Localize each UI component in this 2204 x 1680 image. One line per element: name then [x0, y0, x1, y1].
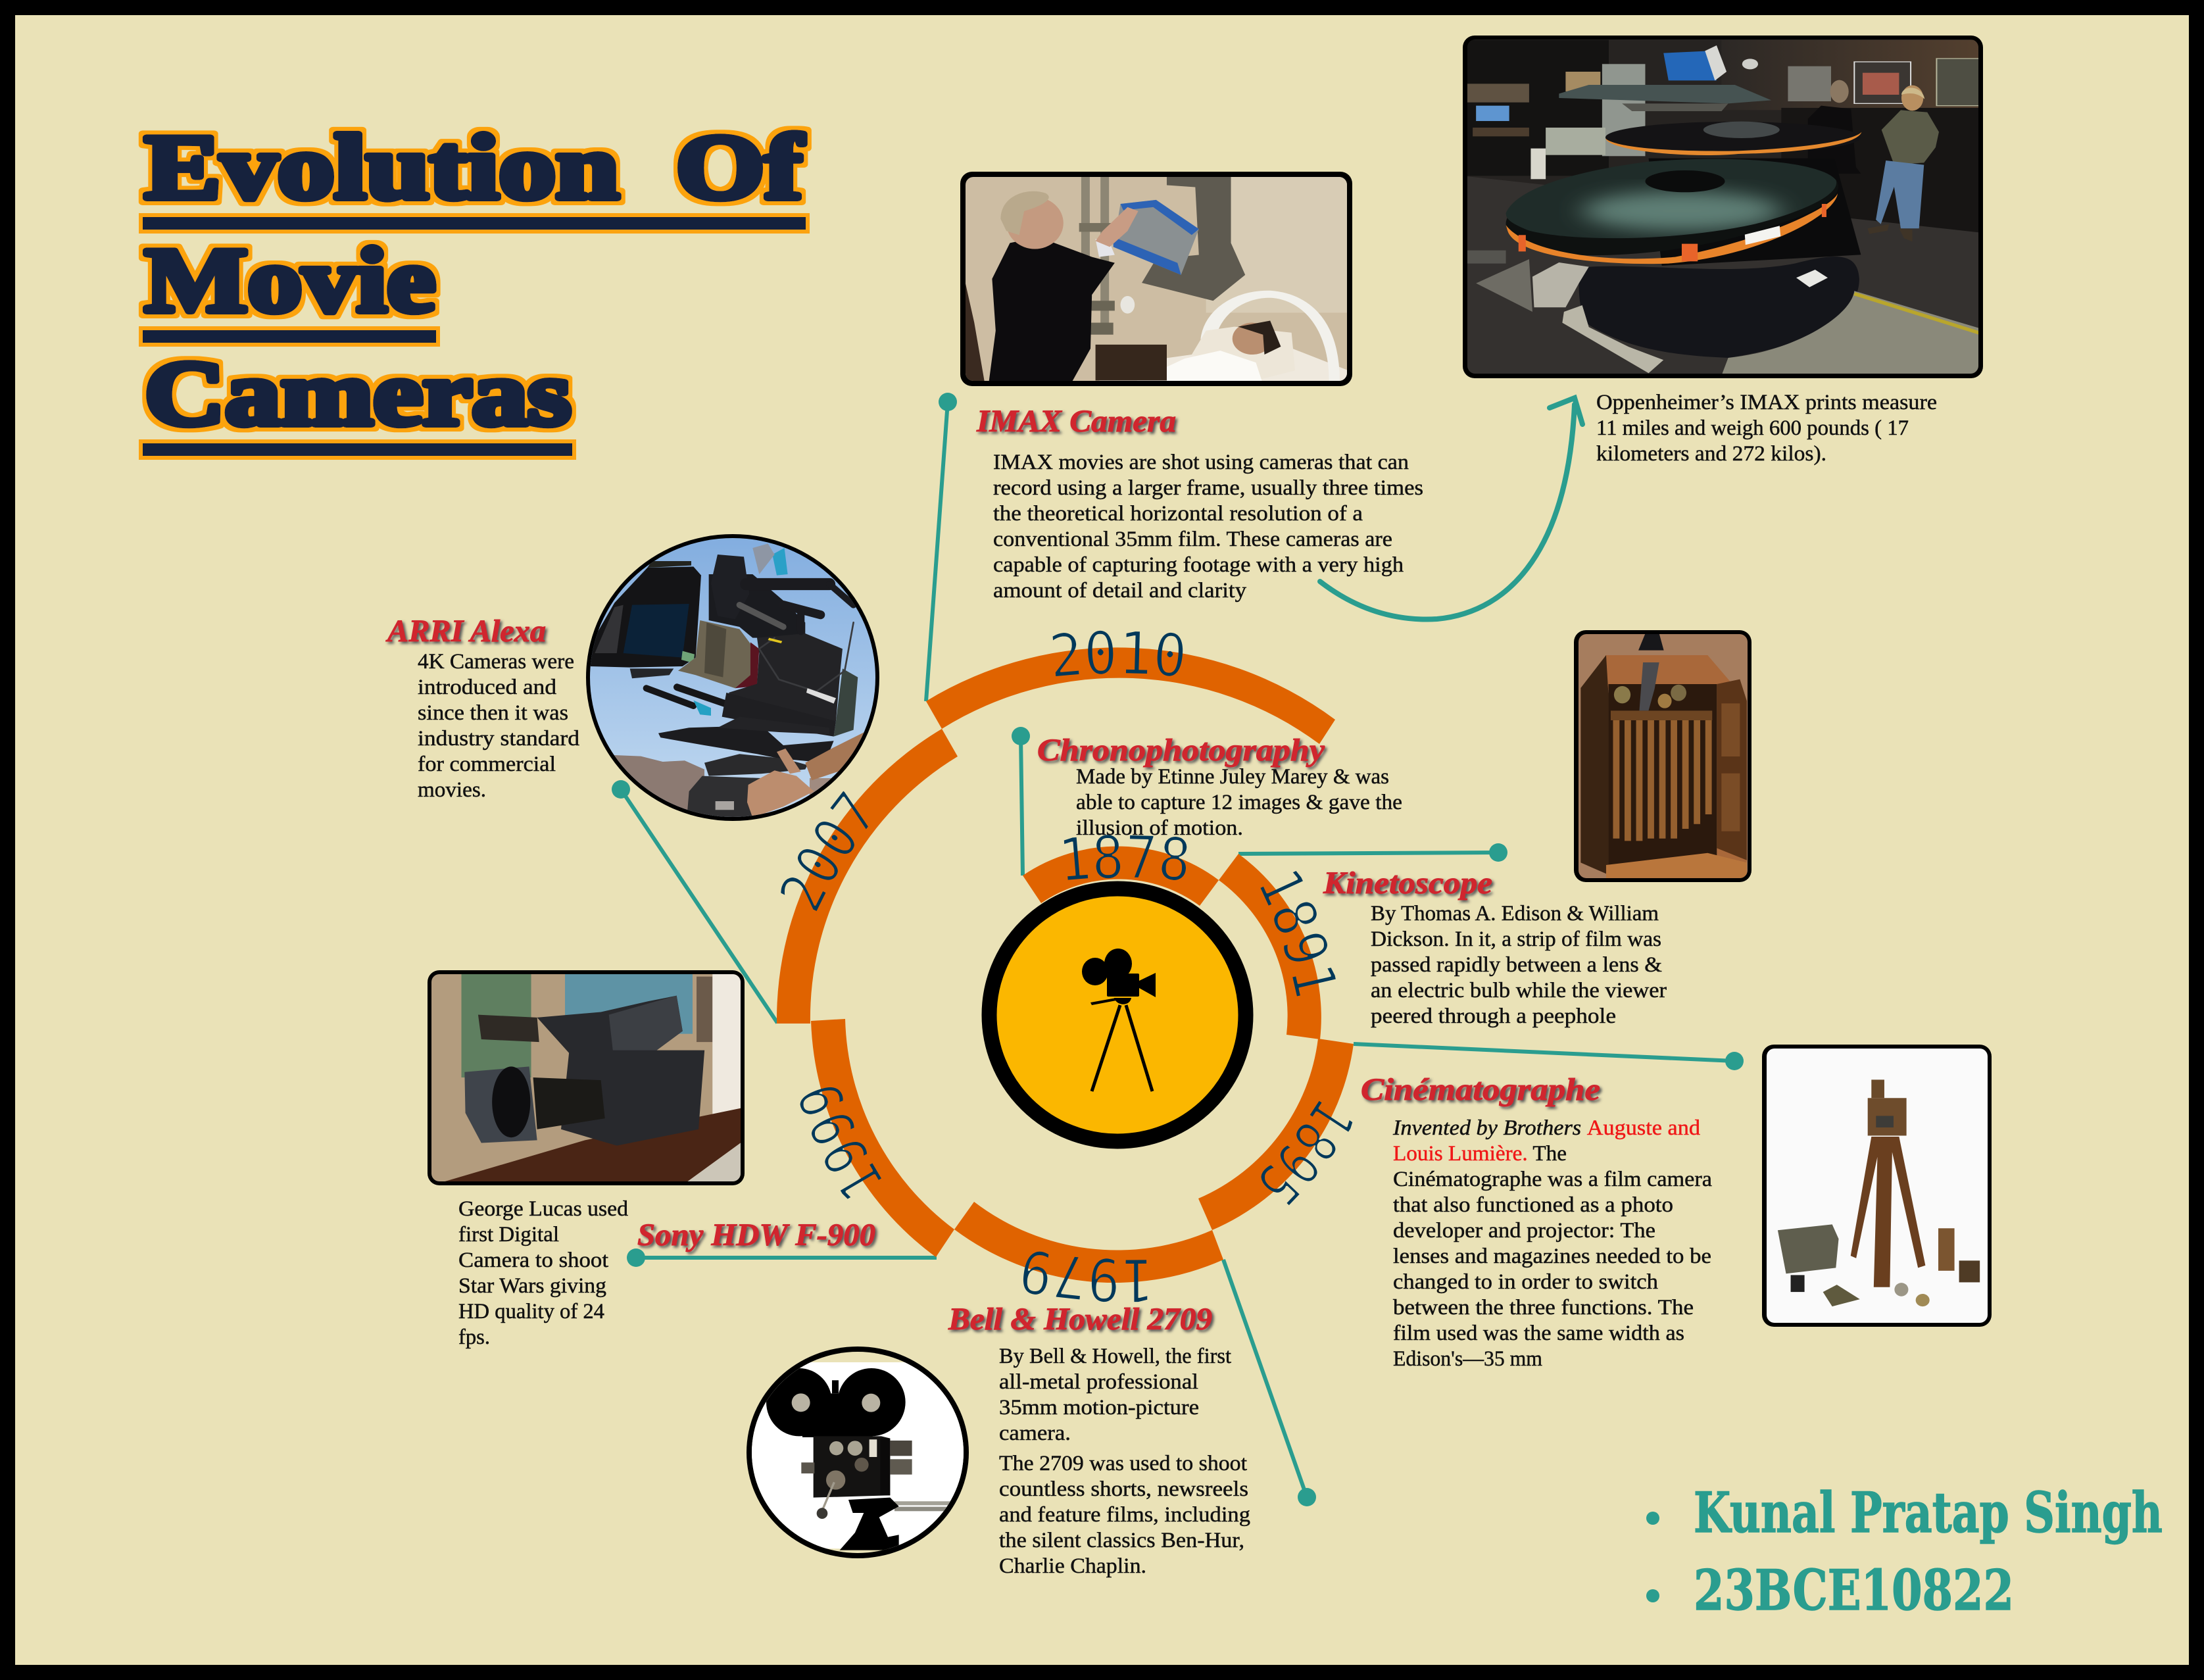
- text: Chronophotography description: [1076, 765, 1402, 840]
- photo: Bell and Howell 2709: [745, 1346, 971, 1558]
- connector: Sony: [627, 1248, 937, 1267]
- heading: Cinematographe: Cinématographe: [1361, 1072, 1600, 1107]
- text: Bell and Howell description: camera.: [999, 1421, 1071, 1445]
- curved arrow: [1320, 398, 1582, 620]
- text: Kinetoscope description: [1371, 902, 1667, 1028]
- author credits: [1646, 1480, 2163, 1623]
- segment 1891: [1219, 854, 1321, 1039]
- text: Kinetoscope description: an electric bulb while the viewer: [1371, 979, 1667, 1002]
- text: IMAX description: record using a larger frame, usually three times: [993, 476, 1423, 500]
- text: IMAX description: [993, 451, 1423, 603]
- text: Bell and Howell description: 35mm motion-picture: [999, 1396, 1199, 1420]
- year 2010: 2010: [1052, 630, 1183, 676]
- centre emblem: movie camera on tripod: [989, 889, 1246, 1141]
- text: Bell and Howell description: the silent classics Ben-Hur,: [999, 1529, 1244, 1552]
- heading: ARRI Alexa: ARRI Alexa: [385, 614, 546, 649]
- segment 1979: [954, 1202, 1223, 1283]
- year 1999: 1999: [800, 1087, 881, 1199]
- text: Sony description: first Digital: [458, 1223, 559, 1247]
- segment 2010: [926, 647, 1335, 744]
- text: IMAX description: the theoretical horizontal resolution of a: [993, 502, 1363, 526]
- year 1891: 1891: [1260, 871, 1336, 996]
- title line: Evolution Of: Evolution Of: [145, 116, 804, 218]
- title line: Movie: Movie: [145, 230, 435, 332]
- heading: Bell and Howell 2709: Bell & Howell 2709: [948, 1302, 1212, 1337]
- title: [141, 116, 808, 458]
- heading: Sony HDW F-900: Sony HDW F-900: [637, 1218, 875, 1252]
- heading: Chronophotography: Chronophotography: [1037, 733, 1325, 768]
- connector lines: [612, 393, 1744, 1506]
- text: ARRI description: movies.: [418, 778, 486, 802]
- text: Cinematographe description: Edison's—35 mm: [1393, 1347, 1542, 1371]
- photo: Kinetoscope: [1574, 630, 1751, 882]
- text: IMAX description: amount of detail and clarity: [993, 579, 1247, 603]
- text: Sony description: HD quality of 24: [458, 1300, 604, 1323]
- text: Bell and Howell description: countless shorts, newsreels: [999, 1477, 1248, 1501]
- text: Sony description: Star Wars giving: [458, 1274, 606, 1298]
- text: Chronophotography description: illusion of motion.: [1076, 816, 1243, 840]
- heading: Kinetoscope: Kinetoscope: [1323, 866, 1492, 901]
- author credits: 23BCE10822: [1694, 1558, 2014, 1623]
- panel: Kinetoscope: [1323, 866, 1667, 1028]
- text: Oppenheimer reel note: [1596, 391, 1937, 466]
- text: IMAX description: conventional 35mm film. These cameras are: [993, 528, 1392, 551]
- text: Kinetoscope description: peered through a peephole: [1371, 1004, 1616, 1028]
- photo: Sony camera: [428, 970, 747, 1187]
- text: Bell and Howell description: and feature films, including: [999, 1503, 1250, 1527]
- text: Cinematographe description: [1392, 1116, 1712, 1371]
- heading: IMAX Camera: IMAX Camera: [976, 404, 1176, 439]
- text: Cinematographe description: between the three functions. The: [1393, 1296, 1694, 1320]
- text: ARRI description: introduced and: [418, 676, 557, 699]
- text: Cinematographe description: Louis Lumière. The: [1393, 1142, 1567, 1166]
- year 1979: 1979: [1023, 1251, 1147, 1302]
- text: Sony description: fps.: [458, 1325, 490, 1349]
- text: Kinetoscope description: Dickson. In it, a strip of film was: [1371, 927, 1661, 951]
- connector: Bell and Howell: [1223, 1260, 1316, 1506]
- segment 2007: [777, 729, 958, 1024]
- panel: ARRI Alexa: [385, 614, 580, 802]
- text: ARRI description: 4K Cameras were: [418, 650, 574, 674]
- text: Chronophotography description: Made by Etinne Juley Marey & was: [1076, 765, 1389, 789]
- text: Bell and Howell description: Charlie Chaplin.: [999, 1554, 1146, 1578]
- connector: Cinematographe: [1354, 1044, 1744, 1070]
- panel: Cinematographe: [1361, 1072, 1712, 1371]
- panel: Chronophotography: [1037, 733, 1402, 840]
- text: Sony description: George Lucas used: [458, 1197, 629, 1221]
- text: Bell and Howell description: [999, 1345, 1250, 1578]
- text: Kinetoscope description: By Thomas A. Edison & William: [1371, 902, 1659, 926]
- text: Oppenheimer reel note: Oppenheimer’s IMAX prints measure: [1596, 391, 1937, 414]
- text: Bell and Howell description: all-metal professional: [999, 1370, 1198, 1394]
- year labels: [766, 619, 1368, 1314]
- text: Cinematographe description: that also functioned as a photo: [1393, 1193, 1673, 1217]
- text: Bell and Howell description: The 2709 was used to shoot: [999, 1452, 1247, 1475]
- connector: Kinetoscope: [1238, 843, 1507, 862]
- text: Cinematographe description: Invented by Brothers Auguste and: [1392, 1116, 1701, 1140]
- text: IMAX description: capable of capturing footage with a very high: [993, 553, 1404, 577]
- text: ARRI description: industry standard: [418, 727, 580, 751]
- text: Sony description: Camera to shoot: [458, 1248, 608, 1272]
- text: Cinematographe description: developer and projector: The: [1393, 1219, 1655, 1243]
- connector: Chronophotography: [1012, 727, 1030, 876]
- photo: Oppenheimer IMAX reel: [1463, 36, 1984, 378]
- title line: Cameras: Cameras: [145, 343, 571, 445]
- text: ARRI description: for commercial: [418, 753, 556, 776]
- text: Cinematographe description: lenses and magazines needed to be: [1393, 1245, 1711, 1268]
- year 1895: 1895: [1261, 1101, 1352, 1205]
- text: IMAX description: IMAX movies are shot using cameras that can: [993, 451, 1409, 474]
- connector: IMAX: [926, 393, 957, 701]
- photo: IMAX camera on set: [960, 172, 1352, 387]
- panel: IMAX Camera: [976, 404, 1423, 603]
- segment 1878: [1023, 847, 1219, 906]
- text: Oppenheimer reel note: 11 miles and weigh 600 pounds ( 17: [1596, 416, 1909, 440]
- text: ARRI description: since then it was: [418, 701, 568, 725]
- text: Kinetoscope description: passed rapidly between a lens &: [1371, 953, 1662, 977]
- timeline spiral ring: [777, 647, 1354, 1283]
- year 1878: 1878: [1056, 823, 1193, 896]
- text: Oppenheimer reel note: kilometers and 272 kilos).: [1596, 442, 1826, 466]
- panel: Bell and Howell 2709: [948, 1302, 1250, 1578]
- photo: Cinematographe: [1762, 1045, 1992, 1327]
- segment 1895: [1198, 1039, 1354, 1230]
- text: Cinematographe description: changed to in order to switch: [1393, 1270, 1659, 1294]
- text: ARRI description: [418, 650, 580, 802]
- year 2007: 2007: [781, 791, 868, 911]
- connector: ARRI: [612, 780, 777, 1023]
- text: Cinematographe description: Cinématographe was a film camera: [1393, 1168, 1712, 1191]
- text: Chronophotography description: able to capture 12 images & gave the: [1076, 791, 1402, 814]
- segment 1999: [811, 1019, 954, 1257]
- photo: ARRI Alexa: [586, 534, 880, 821]
- text: Sony description: [458, 1197, 629, 1349]
- text: Cinematographe description: film used was the same width as: [1393, 1322, 1684, 1345]
- text: Bell and Howell description: By Bell & Howell, the first: [999, 1345, 1231, 1368]
- panel: Sony HDW F-900: [458, 1197, 875, 1349]
